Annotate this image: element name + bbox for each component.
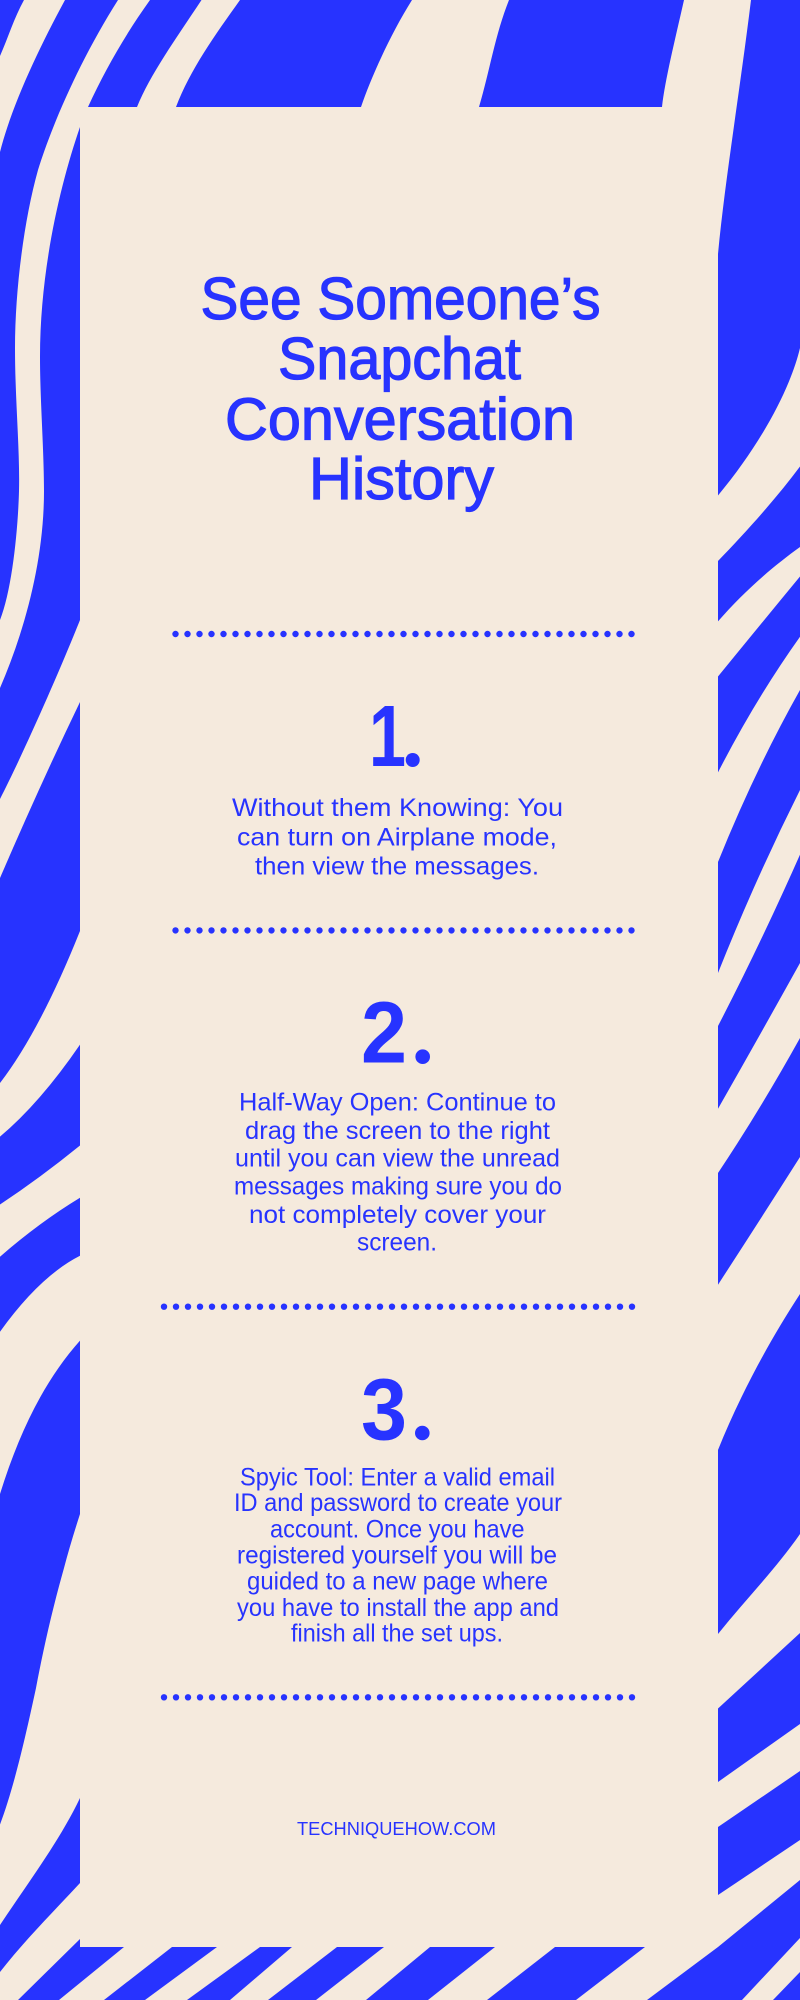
step 3 text: account. Once you have: [270, 1516, 524, 1544]
step 3 text: [234, 1463, 562, 1648]
step 1 number: .: [403, 705, 421, 779]
step 3 text: you have to install the app and: [237, 1594, 559, 1622]
title: See Someone’s: [200, 266, 600, 332]
step 3 text: registered yourself you will be: [237, 1541, 557, 1569]
step 2 number: [361, 985, 431, 1082]
step 2 text: [234, 1089, 562, 1256]
step 2 text: messages making sure you do: [234, 1173, 562, 1201]
bottom stripes: [18, 1880, 800, 2000]
step 2 text: Half-Way Open: Continue to: [239, 1089, 556, 1117]
dotted divider 4: [164, 1694, 632, 1701]
step 3 text: finish all the set ups.: [291, 1620, 503, 1648]
dotted divider 1: [176, 631, 632, 637]
step 2 number: .: [413, 1001, 431, 1075]
step 2 text: screen.: [357, 1228, 437, 1256]
footer source: TECHNIQUEHOW.COM: [297, 1818, 496, 1839]
step 1 text: [232, 794, 563, 880]
step 2 text: not completely cover your: [249, 1201, 546, 1229]
title: Snapchat: [278, 326, 521, 392]
step 3 number: [361, 1362, 431, 1458]
step 1 text: Without them Knowing: You: [232, 794, 563, 822]
title: Conversation: [225, 386, 575, 452]
step 2 text: until you can view the unread: [235, 1144, 560, 1172]
step 1 number: 1: [369, 688, 406, 785]
step 1 text: then view the messages.: [255, 852, 539, 880]
top stripes: [88, 0, 684, 107]
step 2 text: drag the screen to the right: [245, 1117, 550, 1145]
step 3 text: ID and password to create your: [234, 1489, 562, 1517]
dotted divider 3: [164, 1303, 632, 1310]
step 3 number: .: [413, 1378, 431, 1452]
dotted divider 2: [176, 927, 632, 934]
left wavy stripes: [0, 0, 118, 1972]
step 2 number: 2: [361, 985, 407, 1082]
step 3 number: 3: [361, 1362, 407, 1458]
step 3 text: guided to a new page where: [247, 1568, 548, 1596]
step 3 text: Spyic Tool: Enter a valid email: [240, 1463, 555, 1491]
title: [200, 266, 600, 512]
right stripes: [718, 0, 800, 1895]
title: History: [309, 446, 494, 512]
step 1 text: can turn on Airplane mode,: [237, 824, 557, 852]
